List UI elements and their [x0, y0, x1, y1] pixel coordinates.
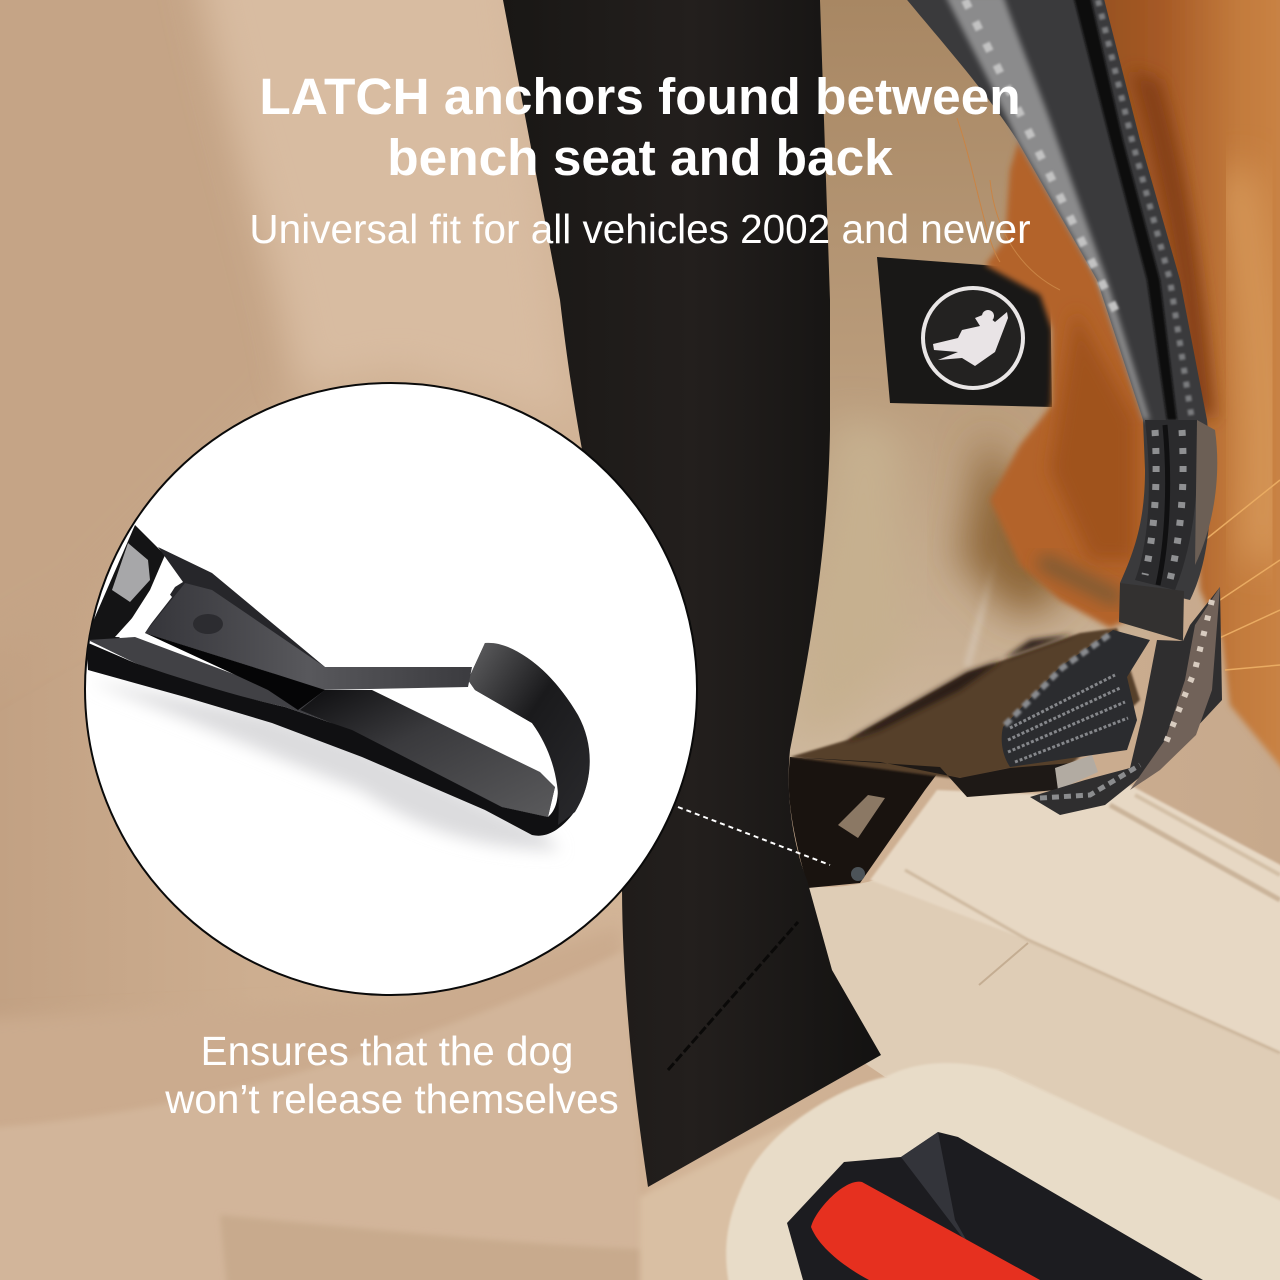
title: LATCH anchors found between: [259, 67, 1021, 125]
frame behind: [145, 547, 325, 675]
inner glossy surface: [300, 690, 555, 817]
caption: Ensures that the dog: [201, 1028, 573, 1074]
hook head: [468, 643, 590, 825]
rivet: [193, 614, 223, 634]
black wedge: [145, 633, 325, 710]
dog fur right of leash: [1090, 0, 1280, 790]
black outer strip: [86, 642, 589, 836]
dark anchor housing in seat crease: [789, 757, 940, 888]
black tag with seat icon: [877, 257, 1052, 407]
upper lever plate: [145, 583, 472, 690]
seat cushion: [0, 785, 1280, 1280]
ribbed leash fold: [1002, 630, 1150, 767]
soft shadow: [88, 680, 560, 850]
leash loop and brown reflective band: [1030, 587, 1222, 815]
seat belt buckle surround: [726, 1063, 1280, 1280]
dog fur left of leash: [957, 118, 1150, 628]
latch plate under leash: [790, 628, 1140, 797]
caption: [165, 1028, 619, 1122]
leash slider: [1119, 583, 1184, 641]
strap stitch: [668, 922, 798, 1070]
circular inset: metal clip hook: [84, 382, 698, 996]
title: [259, 67, 1021, 186]
caption: won’t release themselves: [165, 1076, 619, 1122]
subtitle: Universal fit for all vehicles 2002 and newer: [249, 206, 1031, 252]
lower body: [88, 637, 555, 817]
webbing: [85, 525, 165, 640]
black seat belt strap: [503, 0, 881, 1187]
leash upper strands: [903, 0, 1217, 600]
title: bench seat and back: [387, 128, 893, 186]
